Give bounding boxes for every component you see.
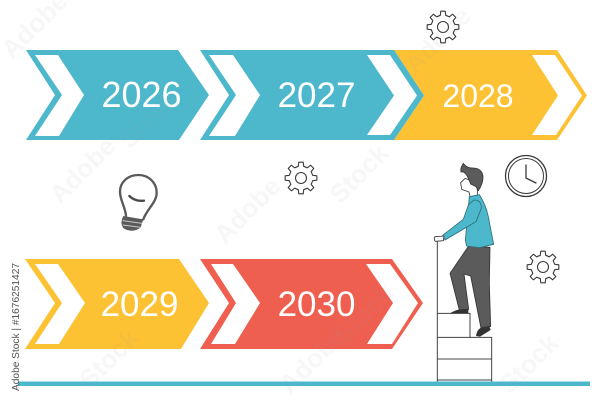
faint background watermarks: Stock: [323, 138, 395, 209]
arrow: 2030: 2030: [278, 285, 355, 324]
arm: [434, 200, 481, 241]
arrow: 2028: [394, 50, 587, 140]
baseline: [18, 382, 590, 386]
icon: gear right: [527, 251, 559, 283]
faint background watermarks: Stock: [493, 328, 565, 399]
icon: gear top: [427, 11, 459, 43]
shirt: [465, 195, 494, 248]
faint background watermarks: Stock: [328, 278, 400, 349]
faint background watermarks: Adobe: [208, 171, 286, 249]
arrow: 2026: 2026: [101, 74, 182, 115]
icon: light bulb: [120, 175, 157, 231]
faint background watermarks: Stock: [73, 323, 145, 394]
person on stairs: [434, 163, 494, 382]
arrow: 2027: [200, 50, 424, 140]
stairs and handrail: [437, 240, 492, 382]
arrow: 2029: 2029: [101, 285, 178, 324]
faint background watermarks: Adobe: [43, 131, 121, 209]
arrow: 2028: 2028: [442, 78, 514, 114]
arrow: 2029: [25, 259, 209, 349]
icon: gear middle: [285, 162, 317, 194]
watermark id: Adobe Stock | #1676251427: [10, 263, 22, 391]
faint background watermarks: Adobe: [273, 321, 351, 399]
faint background watermarks: Stock: [113, 83, 185, 154]
arrow: 2027: 2027: [278, 76, 355, 115]
icon: clock: [506, 156, 546, 196]
legs: [450, 246, 491, 337]
arrow: 2026: [26, 50, 209, 140]
faint background watermarks: Adobe: [398, 1, 476, 79]
head and hair: [461, 163, 483, 197]
arrow: 2030: [200, 259, 423, 349]
